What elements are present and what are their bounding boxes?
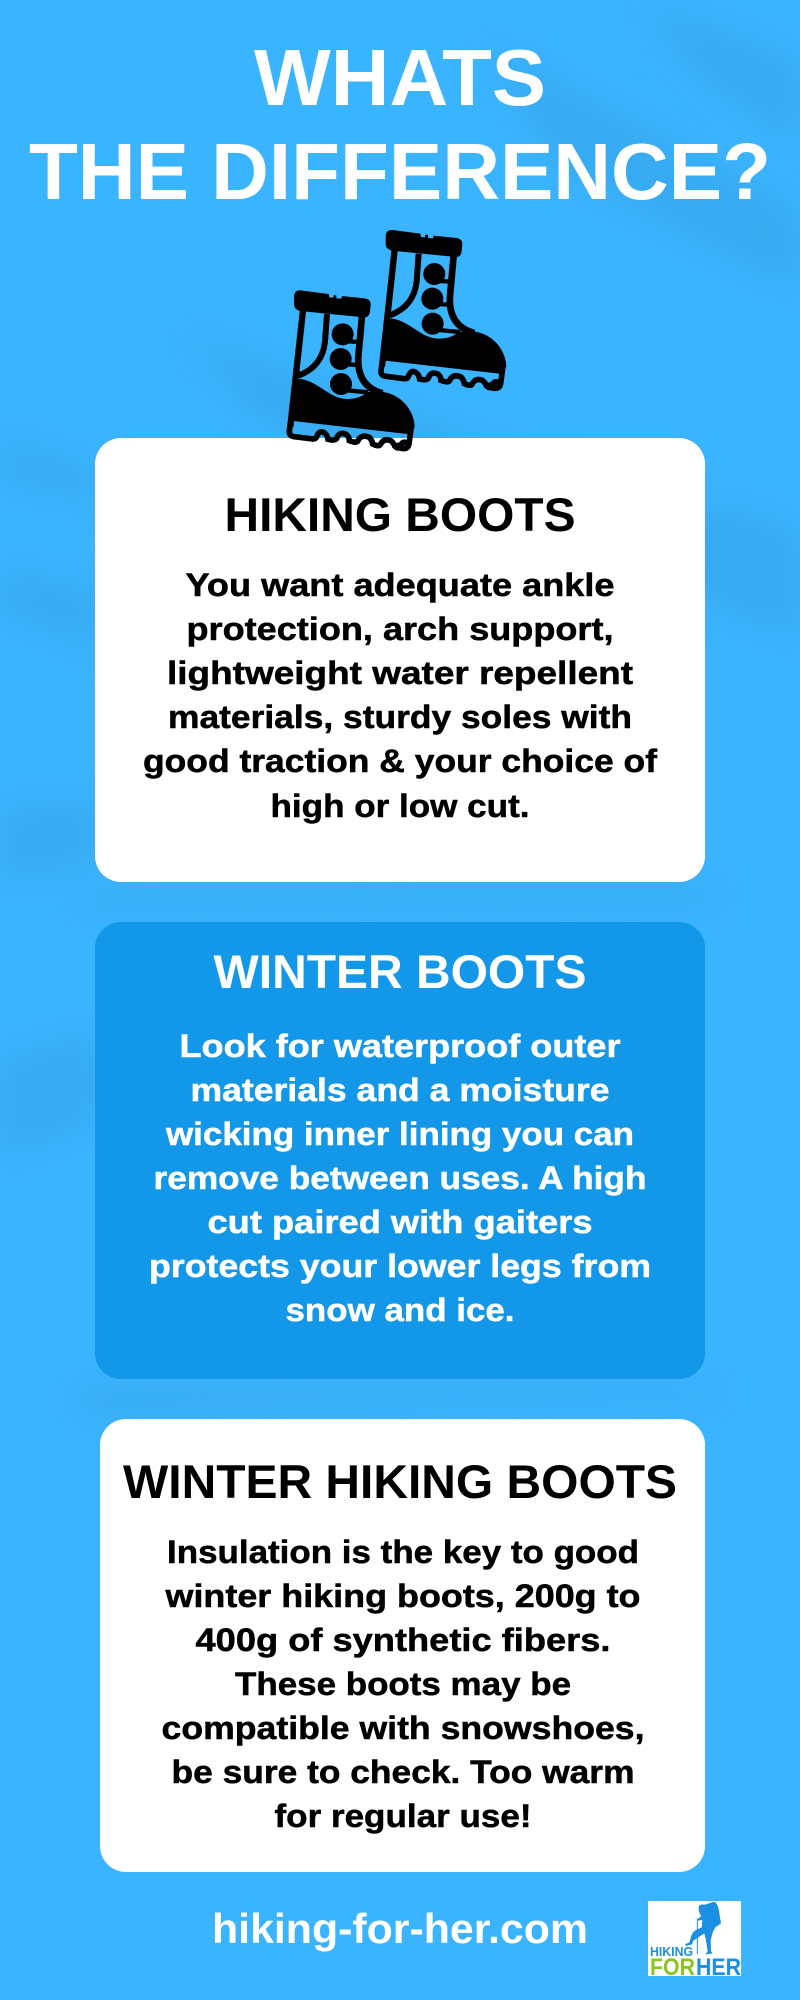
- panel: hiking boots: [95, 438, 705, 882]
- text block: winter boots description: snow and ice.: [286, 1292, 514, 1328]
- title: [29, 33, 771, 216]
- text block: winter boots description: cut paired with gaiters: [208, 1204, 592, 1240]
- text block: hiking boots description: [143, 567, 657, 824]
- text block: hiking boots description: materials, sturdy soles with: [168, 699, 632, 735]
- text block: winter hiking boots description: 400g of synthetic fibers.: [196, 1622, 610, 1658]
- text block: winter hiking boots description: be sure to check. Too warm: [172, 1754, 634, 1790]
- text block: winter hiking boots description: compatible with snowshoes,: [162, 1710, 644, 1746]
- icon: hiker silhouette: [685, 1902, 721, 1954]
- icon: pair of boots: [289, 230, 506, 449]
- text block: hiking boots description: protection, arch support,: [186, 611, 614, 647]
- text block: winter boots description: protects your lower legs from: [149, 1248, 651, 1284]
- logo text: for: FOR: [650, 1954, 695, 1981]
- text block: winter boots description: [149, 1028, 651, 1328]
- text block: hiking boots description: lightweight water repellent: [167, 655, 633, 691]
- heading: hiking boots: HIKING BOOTS: [224, 488, 576, 541]
- website url: hiking-for-her.com: [212, 1905, 588, 1952]
- text block: winter boots description: Look for waterproof outer: [180, 1028, 620, 1064]
- logo text: her: HER: [696, 1954, 741, 1981]
- panel: winter hiking boots: [100, 1419, 705, 1872]
- panel: winter boots: [95, 922, 705, 1379]
- title: THE DIFFERENCE?: [29, 127, 771, 216]
- text block: winter hiking boots description: winter hiking boots, 200g to: [164, 1578, 640, 1614]
- text block: hiking boots description: high or low cut.: [270, 788, 530, 824]
- title: WHATS: [254, 33, 546, 122]
- text block: winter hiking boots description: Insulation is the key to good: [167, 1534, 639, 1570]
- logo text: hiking: HIKING: [650, 1945, 693, 1959]
- text block: winter boots description: materials and a moisture: [190, 1072, 610, 1108]
- text block: winter hiking boots description: These boots may be: [235, 1666, 571, 1702]
- text block: hiking boots description: You want adequate ankle: [186, 567, 614, 603]
- text block: winter boots description: remove between uses. A high: [154, 1160, 646, 1196]
- text block: winter hiking boots description: [162, 1534, 644, 1834]
- text block: winter hiking boots description: for regular use!: [274, 1798, 532, 1834]
- heading: winter hiking boots: WINTER HIKING BOOTS: [123, 1455, 677, 1508]
- text block: winter boots description: wicking inner lining you can: [165, 1116, 634, 1152]
- heading: winter boots: WINTER BOOTS: [214, 945, 586, 998]
- logo: hiking for her: [648, 1901, 741, 1981]
- text block: hiking boots description: good traction & your choice of: [143, 743, 657, 779]
